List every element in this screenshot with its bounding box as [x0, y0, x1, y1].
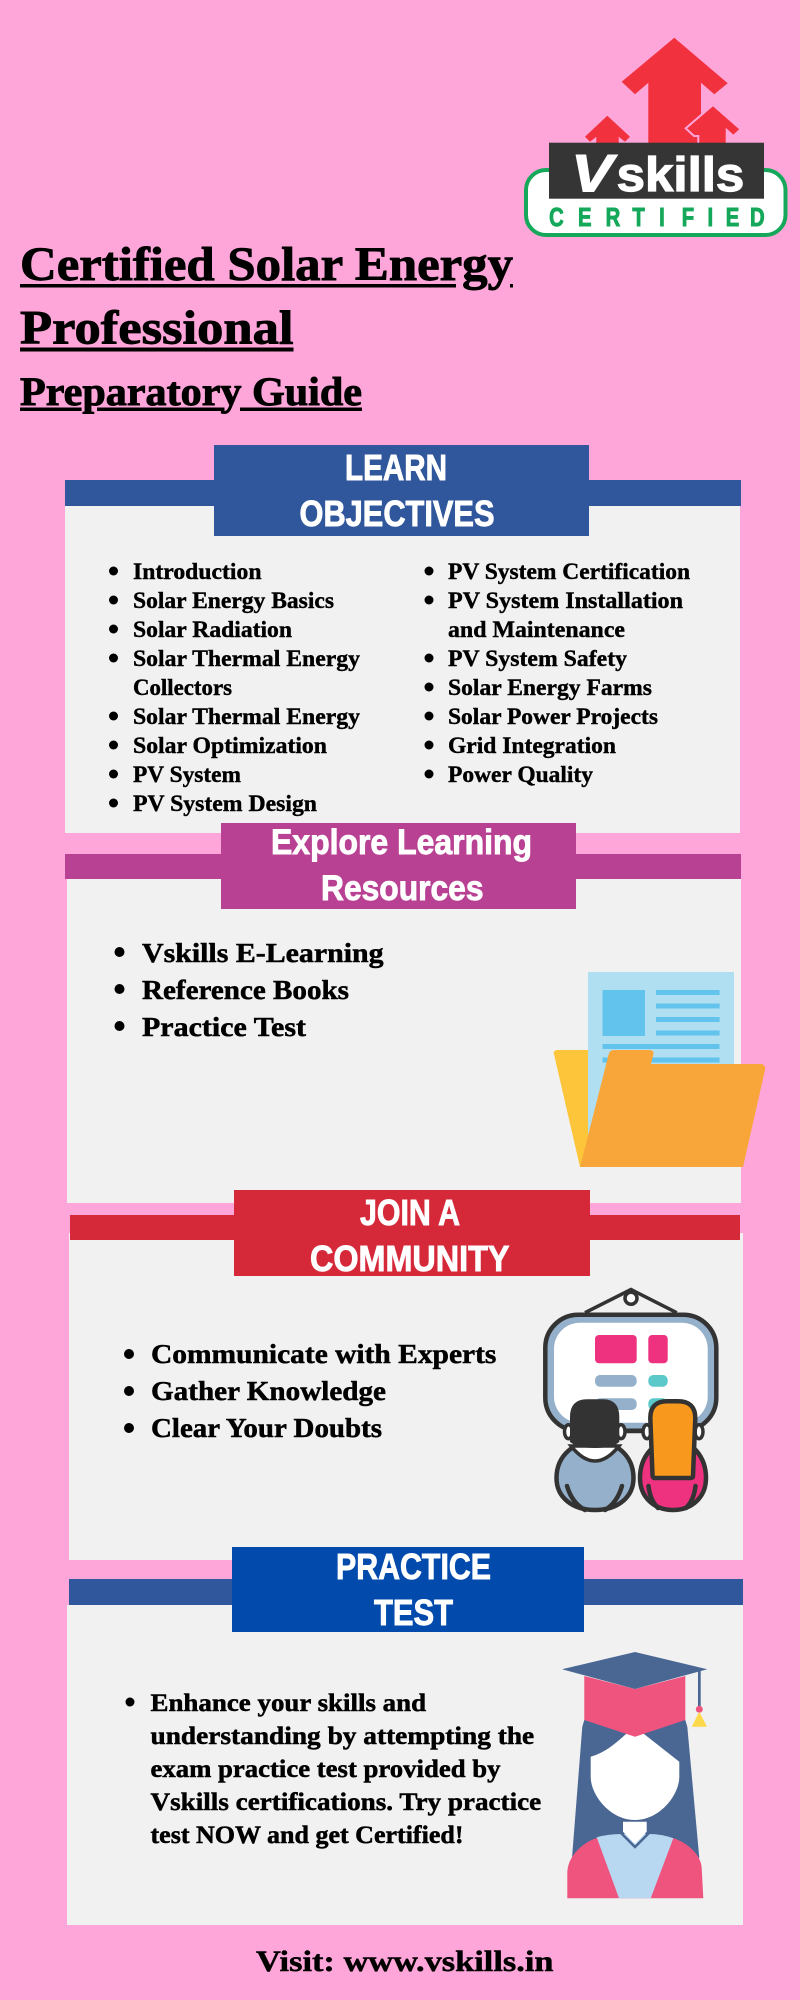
list: community benefits: Communicate with Experts [151, 1339, 496, 1369]
footer: website link: Visit: www.vskills.in [256, 1945, 554, 1978]
header: join a community: JOIN A [360, 1192, 460, 1233]
panel: practice test [67, 1546, 743, 1925]
list: resources: Reference Books [142, 975, 349, 1005]
title: Certified Solar Energy Professional: Certified Solar Energy [20, 238, 513, 291]
panel body [67, 879, 741, 1203]
logo wordmark certified: CERTIFIED [549, 203, 765, 232]
text block: practice test description: test NOW and get Certified! [150, 1822, 464, 1849]
list: right column topics: Power Quality [448, 762, 593, 787]
list: right column topics [424, 559, 690, 787]
list: community benefits [124, 1339, 496, 1443]
header: learn objectives: LEARN [345, 447, 447, 488]
list: right column topics: and Maintenance [448, 617, 625, 642]
list: community benefits: Gather Knowledge [151, 1376, 386, 1406]
header: explore learning resources: Resources [321, 869, 484, 908]
list: right column topics: Grid Integration [448, 733, 616, 758]
list: left column topics: PV System [133, 762, 241, 787]
dark name plate [549, 143, 764, 199]
header: practice test: PRACTICE [336, 1546, 491, 1587]
header: practice test [69, 1546, 743, 1633]
header: practice test: TEST [374, 1592, 453, 1633]
list: left column topics: Solar Thermal Energy [133, 704, 361, 729]
list: left column topics: PV System Design [133, 791, 317, 816]
list: right column topics: PV System Installation [448, 588, 683, 613]
panel: explore learning resources [65, 823, 765, 1203]
subtitle: Preparatory Guide: Preparatory Guide [20, 369, 362, 414]
header: learn objectives [65, 445, 741, 536]
icon: graduate [562, 1652, 707, 1898]
list: left column topics: Solar Optimization [133, 733, 327, 758]
list: resources [114, 938, 384, 1042]
badge outline [526, 170, 786, 235]
header: join a community: COMMUNITY [310, 1238, 510, 1279]
text block: practice test description [126, 1690, 541, 1849]
header: explore learning resources [65, 823, 741, 909]
logo wordmark V: V [571, 145, 619, 204]
list: right column topics: PV System Certification [448, 559, 690, 584]
logo wordmark skills: skills [617, 149, 744, 202]
icon: two people at a board [545, 1290, 716, 1510]
header: join a community [70, 1190, 740, 1279]
icon: red arrows [585, 38, 741, 145]
list: right column topics: Solar Power Projects [448, 704, 658, 729]
list: community benefits: Clear Your Doubts [151, 1413, 382, 1443]
panel: join a community [69, 1190, 743, 1560]
list: right column topics: Solar Energy Farms [448, 675, 652, 700]
text block: practice test description: exam practice test provided by [150, 1756, 501, 1783]
panel body [65, 506, 740, 833]
list: left column topics: Solar Radiation [133, 617, 292, 642]
logo: Vskills Certified [526, 38, 786, 235]
list: left column topics: Introduction [133, 559, 262, 584]
header: learn objectives: OBJECTIVES [300, 493, 494, 534]
header: explore learning resources: Explore Learning [271, 823, 532, 862]
panel body [67, 1605, 743, 1925]
panel: learn objectives [65, 445, 741, 833]
panel body [69, 1233, 743, 1560]
list: resources: Practice Test [142, 1012, 306, 1042]
title: Certified Solar Energy Professional [20, 238, 513, 354]
text block: practice test description: Vskills certifications. Try practice [150, 1789, 541, 1816]
list: left column topics: Solar Energy Basics [133, 588, 334, 613]
icon: folder with document [554, 972, 765, 1167]
text block: practice test description: Enhance your skills and [150, 1690, 426, 1717]
list: left column topics: Solar Thermal Energy [133, 646, 361, 671]
title: Certified Solar Energy Professional: Professional [20, 302, 294, 354]
list: resources: Vskills E-Learning [142, 938, 384, 968]
list: right column topics: PV System Safety [448, 646, 628, 671]
list: left column topics [109, 559, 361, 816]
text block: practice test description: understanding by attempting the [150, 1723, 534, 1750]
list: left column topics: Collectors [133, 675, 232, 700]
